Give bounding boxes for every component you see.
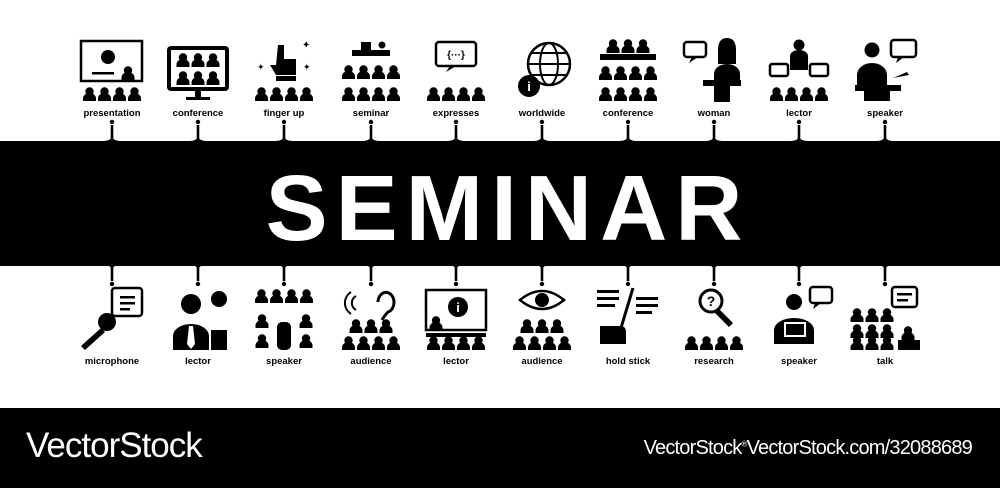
icon: research: ?: [707, 293, 715, 309]
labels top: woman: [698, 108, 730, 119]
icon: expresses: {···}: [447, 50, 465, 61]
icon: lector: [770, 40, 828, 101]
labels bottom: audience: [521, 356, 563, 367]
icon: expresses: [427, 42, 485, 101]
icon: lector (man): [173, 291, 227, 350]
icon: hold stick: [597, 288, 658, 344]
connectors top: [103, 120, 894, 141]
icon: speaker: [855, 40, 916, 101]
footer: [0, 408, 1000, 488]
icon: finger up: ✦: [257, 62, 265, 72]
icon: talk: [850, 287, 920, 350]
labels bottom: lector: [443, 356, 469, 367]
labels bottom: speaker: [266, 356, 302, 367]
icon: audience (ear): [342, 292, 400, 350]
labels top: speaker: [867, 108, 903, 119]
labels bottom: microphone: [85, 356, 139, 367]
labels top: finger up: [264, 108, 304, 119]
labels top: seminar: [353, 108, 389, 119]
central band: [0, 141, 1000, 266]
labels top: [83, 108, 903, 119]
labels bottom: speaker: [781, 356, 817, 367]
icon: research: [685, 290, 743, 350]
labels bottom: lector: [185, 356, 211, 367]
icon: worldwide: i: [527, 79, 531, 94]
labels top: lector: [786, 108, 812, 119]
labels top: expresses: [433, 108, 479, 119]
labels bottom: research: [694, 356, 734, 367]
labels bottom: [85, 356, 894, 367]
labels bottom: audience: [350, 356, 392, 367]
icon: seminar: [342, 42, 400, 101]
footer id: VectorStock®VectorStock.com/32088689: [644, 437, 972, 459]
connectors bottom: [103, 265, 894, 286]
icon: conference (hall): [599, 39, 657, 101]
title: SEMINAR: [266, 156, 750, 260]
labels top: conference: [603, 108, 653, 119]
icon: lector (screen): i: [456, 300, 460, 315]
labels top: worldwide: [519, 108, 565, 119]
icon: presentation: [81, 41, 142, 101]
labels top: presentation: [83, 108, 140, 119]
icon: microphone: [81, 288, 142, 350]
labels top: conference: [173, 108, 223, 119]
footer logo: VectorStock: [26, 426, 202, 465]
icon: lector (screen): [426, 290, 486, 350]
icon: audience (eye): [513, 291, 571, 350]
labels bottom: talk: [877, 356, 893, 367]
labels bottom: hold stick: [606, 356, 650, 367]
icon: finger up: ✦: [302, 40, 310, 51]
icon: speaker (laptop): [774, 287, 832, 344]
icon: woman: [684, 38, 741, 102]
icon: speaker (crowd): [255, 289, 313, 350]
icon: worldwide: [518, 43, 570, 97]
icon: finger up: [255, 40, 313, 101]
icon: conference (video): [167, 46, 229, 100]
icon: finger up: ✦: [303, 62, 311, 72]
